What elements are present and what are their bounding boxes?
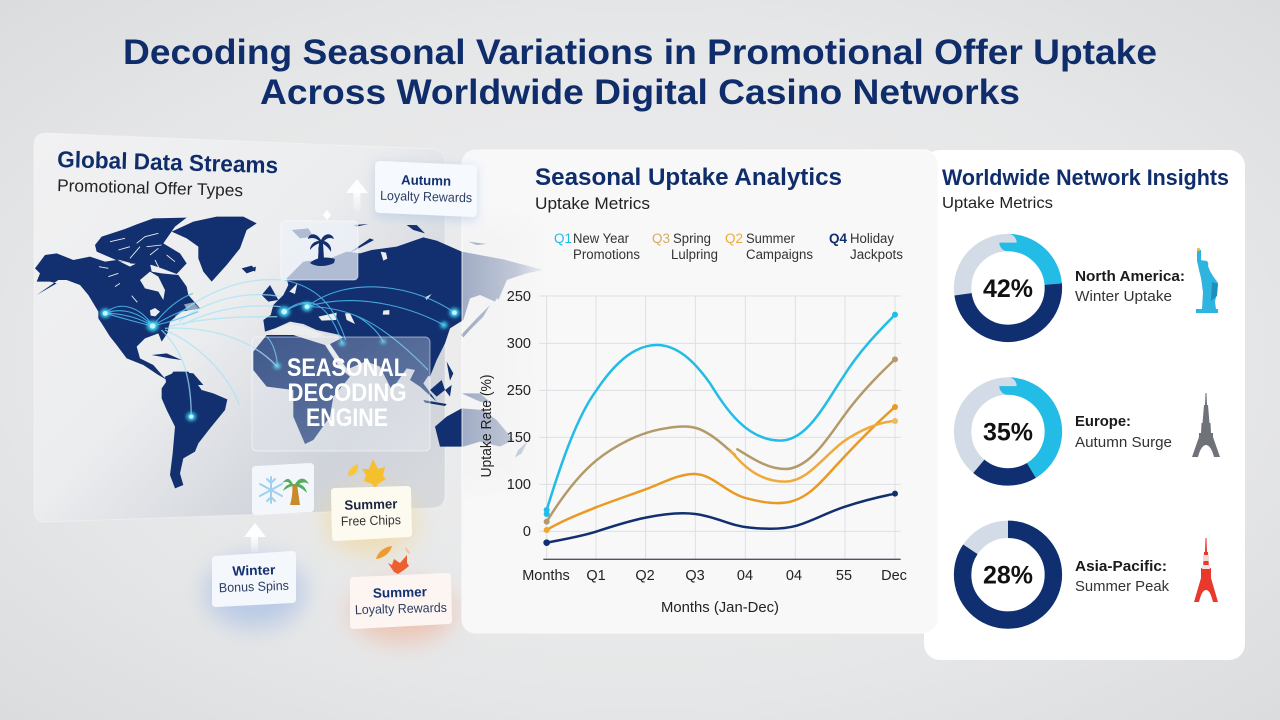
legend: Q3 xyxy=(652,231,670,246)
series: q1 cyan xyxy=(547,315,895,510)
legend: Holiday xyxy=(850,231,894,246)
icon: eiffel tower xyxy=(1192,393,1220,457)
legend: Campaigns xyxy=(746,247,813,262)
y axis labels xyxy=(507,289,531,540)
panel subheading: Uptake Metrics xyxy=(535,195,650,213)
icon: palm tree xyxy=(282,479,309,505)
card: summer free chips xyxy=(331,486,412,541)
series: q3 tan upper xyxy=(547,426,735,522)
card: snowflake and palm icons xyxy=(252,463,314,515)
label: asia-pacific: Asia-Pacific: xyxy=(1075,558,1167,575)
arrow: up to autumn xyxy=(323,179,368,220)
card: seasonal decoding engine xyxy=(252,337,430,451)
label: north america: North America: xyxy=(1075,268,1185,285)
panel: global data streams xyxy=(34,133,445,522)
y axis labels: 300 xyxy=(507,336,531,352)
panel: worldwide network insights xyxy=(924,150,1245,660)
card: summer loyalty rewards: Summer xyxy=(373,584,428,601)
series: q1 summer yellow xyxy=(730,421,895,482)
legend: Q1 xyxy=(554,231,572,246)
x axis title: Months (Jan-Dec) xyxy=(661,600,779,616)
y axis labels: 250 xyxy=(507,289,531,305)
continental arcs xyxy=(105,280,454,370)
y axis title: Uptake Rate (%) xyxy=(479,374,495,478)
y axis labels: 0 xyxy=(523,524,531,540)
card: seasonal decoding engine: ENGINE xyxy=(306,404,388,432)
card: summer loyalty rewards: Loyalty Rewards xyxy=(355,600,448,617)
x axis labels: Q3 xyxy=(685,568,705,584)
y axis labels: 100 xyxy=(507,477,531,493)
icon: statue of liberty xyxy=(1196,248,1218,313)
transatlantic arcs xyxy=(161,280,281,417)
x axis labels xyxy=(522,568,907,584)
donut: europe 35%: 35% xyxy=(983,418,1033,446)
icon: yellow leaves xyxy=(348,459,386,489)
y axis labels: 150 xyxy=(507,430,531,446)
label: asia-pacific xyxy=(1075,558,1169,595)
label: north america: Winter Uptake xyxy=(1075,288,1172,305)
title xyxy=(123,33,1157,112)
donut: europe 35% xyxy=(963,386,1053,477)
card: seasonal decoding engine: SEASONAL xyxy=(287,354,407,382)
card: autumn loyalty rewards: Loyalty Rewards xyxy=(380,188,473,205)
x axis labels: Q1 xyxy=(586,568,606,584)
legend: Promotions xyxy=(573,247,640,262)
legend: Q4 xyxy=(829,231,848,246)
label: europe: Autumn Surge xyxy=(1075,434,1172,451)
hub points xyxy=(103,304,457,419)
panel heading: Global Data Streams xyxy=(57,146,279,178)
card: autumn loyalty rewards xyxy=(375,161,477,221)
eurasia, africa and australasia xyxy=(250,224,543,457)
x axis labels: Q2 xyxy=(635,568,655,584)
card: winter bonus spins xyxy=(212,551,296,607)
series: q2 orange xyxy=(547,407,895,530)
arrow: up to winter icon xyxy=(244,523,266,552)
x axis labels: Months xyxy=(522,568,570,584)
panel heading: Worldwide Network Insights xyxy=(942,165,1229,190)
panel subheading: Promotional Offer Types xyxy=(57,176,243,200)
panel: seasonal uptake analytics xyxy=(462,150,938,633)
glow: winter xyxy=(205,556,305,628)
card: palm icon xyxy=(281,221,358,280)
label: europe xyxy=(1075,413,1172,451)
legend: Jackpots xyxy=(850,247,903,262)
label: asia-pacific: Summer Peak xyxy=(1075,578,1169,595)
title: Decoding Seasonal Variations in Promotional Offer Uptake xyxy=(123,33,1157,72)
card: autumn loyalty rewards: Autumn xyxy=(401,172,451,189)
x axis labels: Dec xyxy=(881,568,907,584)
card: summer free chips: Free Chips xyxy=(341,512,402,529)
glow: free chips xyxy=(325,490,417,554)
series: q3 tan lower xyxy=(737,359,895,469)
line chart xyxy=(479,289,907,616)
x axis labels: 55 xyxy=(836,568,852,584)
card: winter bonus spins: Bonus Spins xyxy=(219,578,290,595)
glow: loyalty rewards xyxy=(350,582,454,642)
legend: New Year xyxy=(573,231,629,246)
card: summer free chips: Summer xyxy=(344,496,398,513)
legend xyxy=(554,231,903,262)
donut: asia-pacific 28% xyxy=(963,529,1053,620)
x axis labels: 04 xyxy=(737,568,753,584)
label: europe: Europe: xyxy=(1075,413,1131,430)
series end points xyxy=(543,312,898,546)
card: winter bonus spins: Winter xyxy=(232,562,276,579)
south america xyxy=(162,372,227,488)
donut: north america 42%: 42% xyxy=(983,275,1033,303)
label: north america xyxy=(1075,268,1185,305)
icon: orange leaves xyxy=(376,546,410,574)
icon: tokyo tower xyxy=(1194,538,1218,602)
north america xyxy=(35,217,257,385)
legend: Lulpring xyxy=(671,247,718,262)
legend: Summer xyxy=(746,231,795,246)
card: summer loyalty rewards xyxy=(350,573,452,629)
legend: Q2 xyxy=(725,231,743,246)
world map xyxy=(35,217,543,488)
panel subheading: Uptake Metrics xyxy=(942,195,1053,212)
hub glows xyxy=(100,302,459,421)
icon: snowflake xyxy=(260,477,282,503)
legend: Spring xyxy=(673,231,711,246)
y axis labels: 250 xyxy=(507,383,531,399)
donut: asia-pacific 28%: 28% xyxy=(983,562,1033,590)
panel heading: Seasonal Uptake Analytics xyxy=(535,164,842,191)
series: q4 navy xyxy=(547,494,895,543)
card: seasonal decoding engine: DECODING xyxy=(288,379,406,407)
data stream arcs xyxy=(100,280,459,421)
title: Across Worldwide Digital Casino Networks xyxy=(260,73,1020,112)
x axis labels: 04 xyxy=(786,568,802,584)
donut: north america 42% xyxy=(963,243,1053,333)
